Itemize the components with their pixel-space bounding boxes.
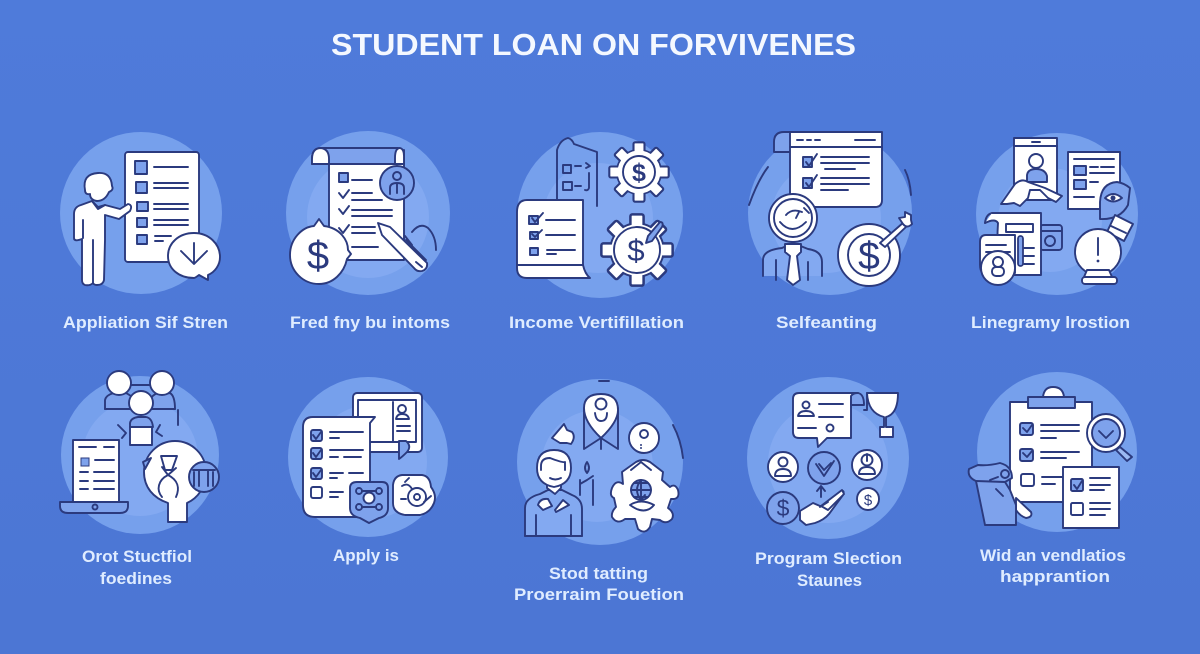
icon: person circle left (768, 452, 798, 482)
label: step 5: Linegramy lrostion (971, 314, 1130, 332)
icon: trophy (864, 393, 898, 437)
icon: ID card (353, 393, 422, 459)
icon: crystal ball (1075, 215, 1133, 284)
label: step 3: Income Vertifillation (509, 314, 684, 332)
label: step 7: Apply is (333, 547, 399, 565)
icon: small checklist (1063, 467, 1119, 528)
label: step 9: Staunes (797, 572, 862, 590)
icon: small number shape (552, 424, 574, 444)
icon: laptop document (60, 440, 128, 513)
icon: dollar circle right: $ (864, 492, 873, 509)
icon: small circle (629, 423, 659, 453)
icon: dollar circle left (767, 492, 799, 524)
panel: group and laptop (60, 371, 219, 534)
label: step 10: happrantion (1000, 568, 1110, 586)
panel: program selection (747, 377, 909, 539)
icon: note bubble (793, 393, 864, 447)
label: step 8: Proerraim Fouetion (514, 586, 684, 604)
panel: verification happening (969, 372, 1137, 532)
icon: scroll document (312, 148, 404, 260)
icon: dollar target with arrow: $ (858, 235, 880, 278)
icon: three people (105, 371, 178, 445)
icon: document scroll (985, 213, 1041, 275)
panel: application checklist (60, 132, 222, 294)
label: step 6 (82, 548, 192, 588)
icon: back document (557, 138, 597, 206)
panel: form with dollar (286, 131, 450, 295)
label: step 8: Stod tatting (549, 565, 648, 583)
icon: speech bubble arrow (168, 233, 220, 280)
label: step 6: Orot Stuctfiol (82, 548, 192, 566)
icon: dollar bubble (290, 219, 351, 284)
icon: checklist document (125, 152, 199, 262)
icon: person with tie (763, 194, 822, 285)
panel: linegramy (976, 133, 1138, 295)
icon: check circle (808, 452, 840, 484)
icon: browser window (774, 132, 882, 207)
label: step 2: Fred fny bu intoms (290, 314, 450, 332)
icon: person circle right (852, 450, 882, 480)
icon: person head (85, 173, 113, 201)
title: STUDENT LOAN ON FORVIVENES (331, 27, 856, 62)
icon: ribbon pin (584, 394, 618, 449)
label: step 8 (514, 565, 684, 604)
icon: columns badge (189, 462, 219, 492)
icon: checklist document (517, 200, 590, 278)
icon: student bust (525, 450, 582, 536)
icon: candle (580, 462, 593, 505)
panel: student training (517, 379, 683, 545)
icon: person with cap (969, 463, 1031, 525)
icon: globe gear (611, 460, 678, 532)
icon: dollar bubble: $ (307, 234, 329, 278)
icon: dollar gear top (609, 142, 669, 202)
icon: shield (350, 482, 388, 523)
icon: checklist document (303, 417, 375, 517)
label: step 4: Selfeanting (776, 314, 877, 332)
label: step 1: Appliation Sif Stren (63, 314, 228, 332)
icon: dollar gear bottom: $ (627, 233, 645, 268)
label: step 6: foedines (100, 570, 172, 588)
icon: magnifier (1087, 414, 1132, 461)
label: step 9: Program Slection (755, 550, 902, 568)
label: step 9 (755, 550, 902, 590)
icon: dollar target with arrow (838, 212, 912, 286)
icon: emblem (393, 475, 435, 515)
label: step 10 (980, 547, 1126, 586)
icon: person badge (380, 166, 414, 200)
icon: card with lock (980, 235, 1023, 285)
icon: dollar circle right (857, 488, 879, 510)
panel: income verification (517, 132, 683, 298)
icon: tablet with person (1001, 138, 1062, 206)
icon: eye bubble (1100, 182, 1130, 219)
icon: head silhouette (143, 441, 206, 522)
icon: wallet (1040, 225, 1062, 250)
icon: text card (1068, 152, 1120, 209)
icon: pencil (378, 223, 436, 271)
panel: self accounting (748, 131, 912, 295)
icon: dollar circle left: $ (777, 495, 790, 521)
icon: dollar gear top: $ (632, 159, 646, 187)
icon: hand with arrow (800, 486, 844, 525)
icon: clipboard (1010, 387, 1092, 502)
icon: dollar gear bottom (601, 214, 673, 286)
panel: apply (288, 377, 448, 537)
icon: person pointing (74, 201, 131, 285)
label: step 10: Wid an vendlatios (980, 547, 1126, 565)
